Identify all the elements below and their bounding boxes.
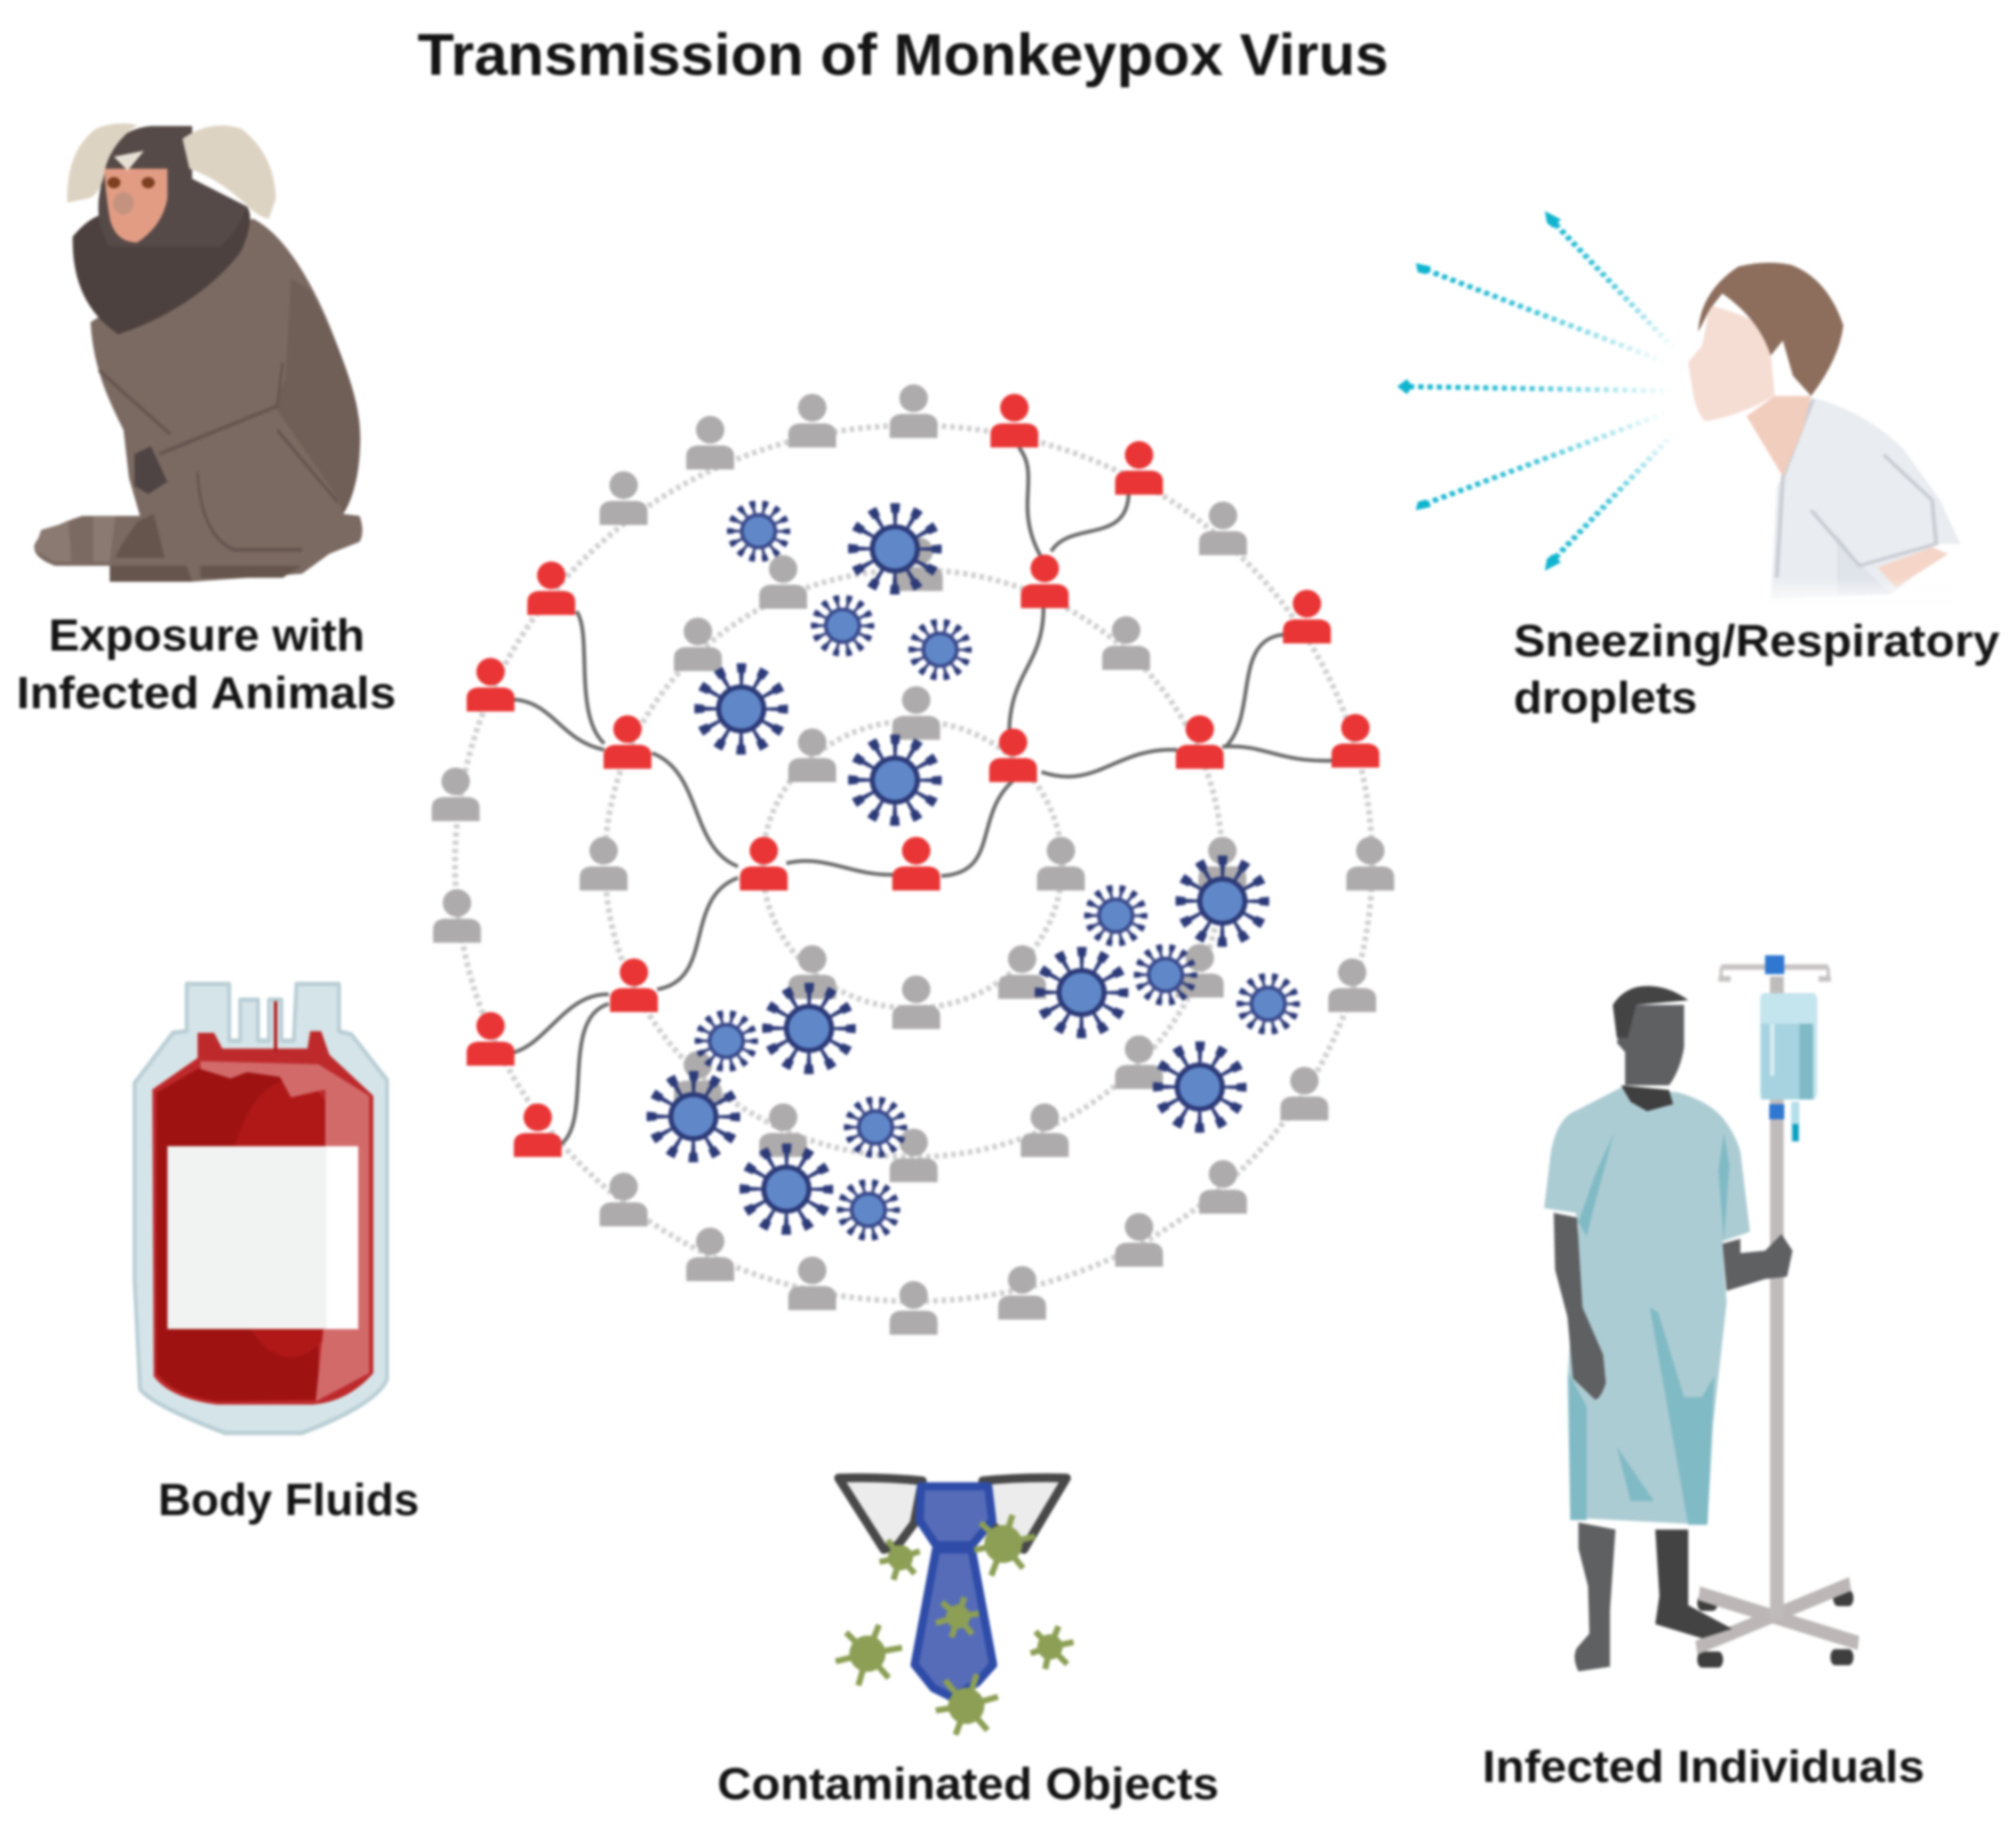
uninfected people (432, 385, 1394, 1335)
concentric contact rings (455, 426, 1372, 1301)
patient figure (1544, 986, 1793, 1672)
infection links (514, 447, 1332, 1144)
label: contaminated objects: Contaminated Objects (717, 1758, 1219, 1809)
chart: transmission network (432, 385, 1394, 1335)
panel: infected individuals (1482, 955, 1925, 1792)
illustration: marmoset monkey (35, 124, 362, 581)
illustration: patient with IV stand (1544, 955, 1859, 1672)
green germ (978, 1518, 1032, 1573)
illustration: sneezing person with droplet arrows (1398, 211, 1960, 608)
illustration: blood bag (134, 984, 387, 1433)
label: exposure with infected animals: Infected Animals (16, 667, 396, 718)
green germ (838, 1628, 899, 1682)
label: sneezing/respiratory droplets (1514, 615, 2000, 723)
label: exposure with infected animals (16, 609, 396, 718)
illustration: contaminated tie and collar (838, 1478, 1071, 1732)
label: exposure with infected animals: Exposure with (49, 609, 365, 660)
panel: sneezing or respiratory droplets (1398, 211, 2000, 723)
green germ (939, 1600, 976, 1635)
virus particles (651, 503, 1296, 1238)
title: Transmission of Monkeypox Virus (418, 23, 1388, 88)
panel: body fluids (134, 984, 419, 1525)
panel: infected animals (16, 124, 396, 718)
label: infected individuals: Infected Individuals (1482, 1741, 1925, 1792)
IV stand (1696, 955, 1859, 1659)
label: sneezing/respiratory droplets: Sneezing/Respiratory (1514, 615, 2000, 666)
infected people (467, 394, 1379, 1157)
green germ (883, 1542, 917, 1577)
label: body fluids: Body Fluids (158, 1474, 419, 1525)
panel: contaminated objects (717, 1478, 1219, 1809)
green germ (939, 1677, 995, 1732)
green germ (1034, 1629, 1071, 1666)
label: sneezing/respiratory droplets: droplets (1514, 672, 1697, 723)
